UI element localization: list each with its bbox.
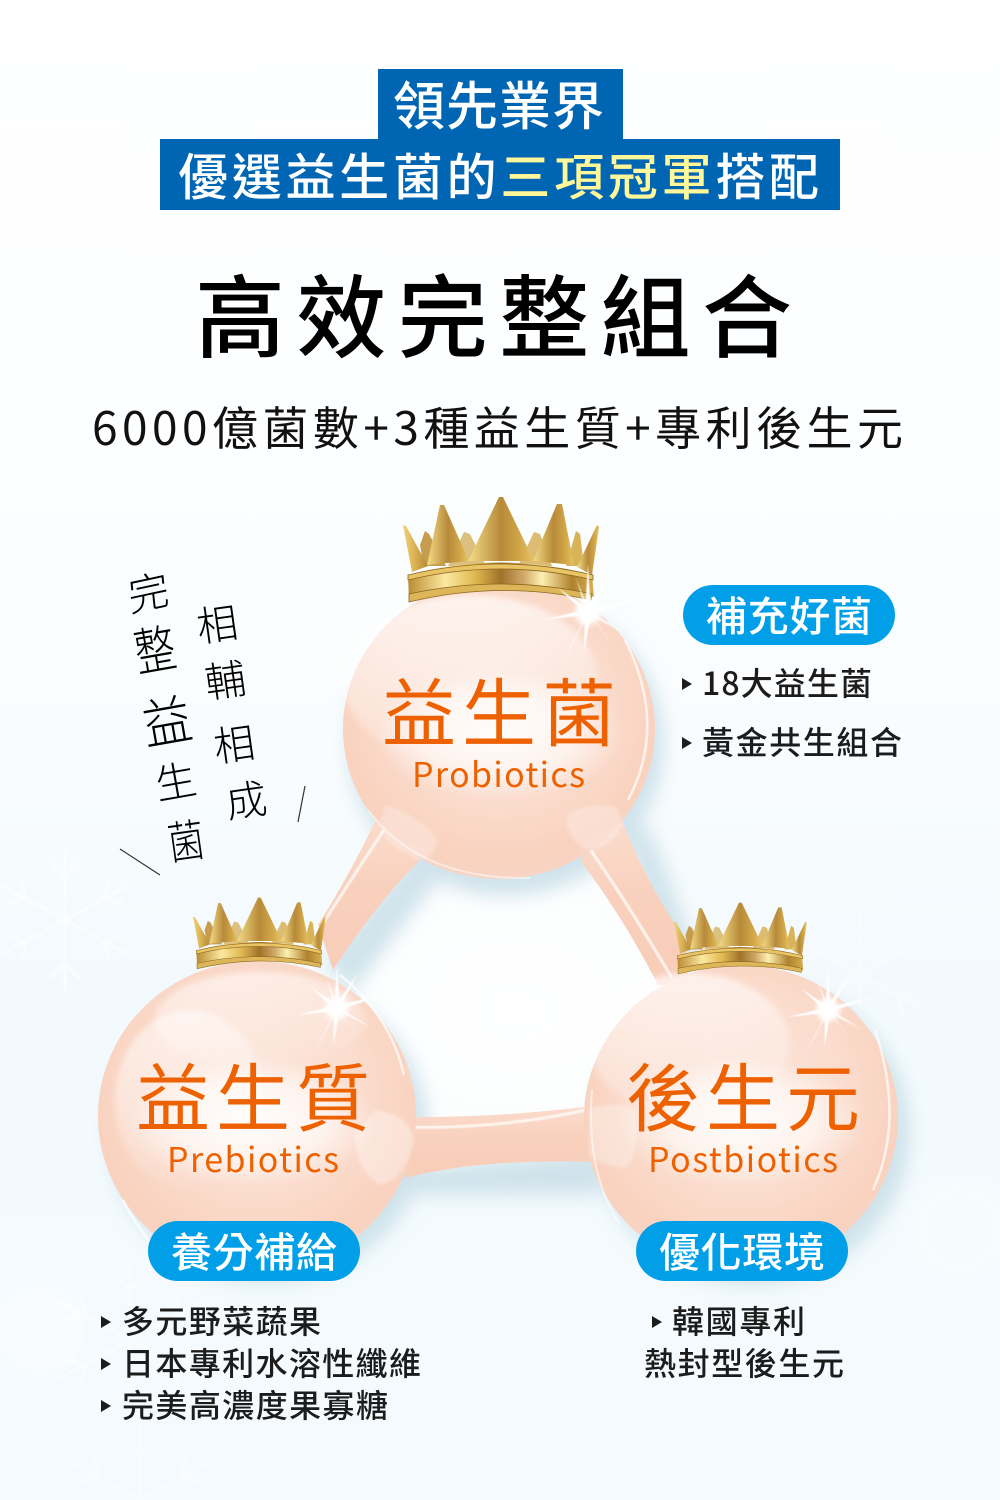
subtitle: 6000億菌數+3種益生質+專利後生元: [92, 393, 903, 459]
list: probiotics benefits: [682, 659, 902, 764]
handwritten note: 生: [150, 746, 200, 812]
sphere: prebiotics: [98, 961, 416, 1271]
handwritten note: 完: [125, 556, 171, 624]
light flares: [296, 564, 873, 1060]
list: probiotics benefits: 黃金共生組合: [702, 718, 902, 764]
list: postbiotics benefits: [644, 1297, 844, 1385]
crown: postbiotics: [674, 903, 807, 974]
main title: 高效完整組合: [195, 246, 792, 376]
list: postbiotics benefits: 熱封型後生元: [644, 1339, 844, 1385]
sphere label: Postbiotics: Postbiotics: [648, 1133, 838, 1182]
list: prebiotics benefits: 多元野菜蔬果: [122, 1297, 321, 1343]
handwritten note: 整: [128, 607, 181, 687]
pill: 補充好菌: 補充好菌: [706, 583, 872, 643]
list: prebiotics benefits: 完美高濃度果寡糖: [122, 1381, 388, 1427]
tube: probiotics to postbiotics: [580, 820, 690, 985]
sphere label: 益生菌: 益生菌: [382, 655, 622, 762]
handwritten note: 輔: [200, 645, 249, 710]
crown: probiotics: [403, 497, 599, 602]
sphere: probiotics: [342, 579, 655, 879]
sphere label: 後生元: 後生元: [626, 1040, 866, 1147]
handwritten note: 相: [209, 709, 258, 774]
handwritten note: 菌: [163, 803, 208, 873]
sphere: postbiotics: [584, 965, 898, 1271]
handwritten note: 益: [135, 676, 197, 760]
list: postbiotics benefits: 韓國專利: [672, 1297, 805, 1343]
sphere label: Prebiotics: Prebiotics: [167, 1133, 339, 1182]
tube: probiotics to prebiotics: [318, 815, 420, 970]
sphere label: 益生質: 益生質: [136, 1040, 376, 1147]
handwritten note: [120, 556, 305, 875]
list: prebiotics benefits: [101, 1297, 421, 1427]
list: prebiotics benefits: 日本專利水溶性纖維: [122, 1339, 421, 1385]
handwritten note: 相: [192, 589, 241, 654]
banner box: top line: 領先業界: [393, 65, 604, 140]
pill: 養分補給: 養分補給: [171, 1219, 337, 1279]
connector tubes: [318, 802, 690, 1178]
sphere label: Probiotics: Probiotics: [412, 748, 585, 797]
handwritten note: 成: [221, 765, 270, 830]
header banner: [160, 65, 840, 210]
tube: prebiotics to postbiotics: [405, 1105, 600, 1178]
banner box: second line: 優選益生菌的三項冠軍搭配: [178, 138, 819, 210]
crown: prebiotics: [193, 898, 326, 969]
list: probiotics benefits: 18大益生菌: [702, 659, 872, 705]
pill: 優化環境: 優化環境: [659, 1219, 825, 1279]
sphere shadows: [108, 592, 910, 1284]
